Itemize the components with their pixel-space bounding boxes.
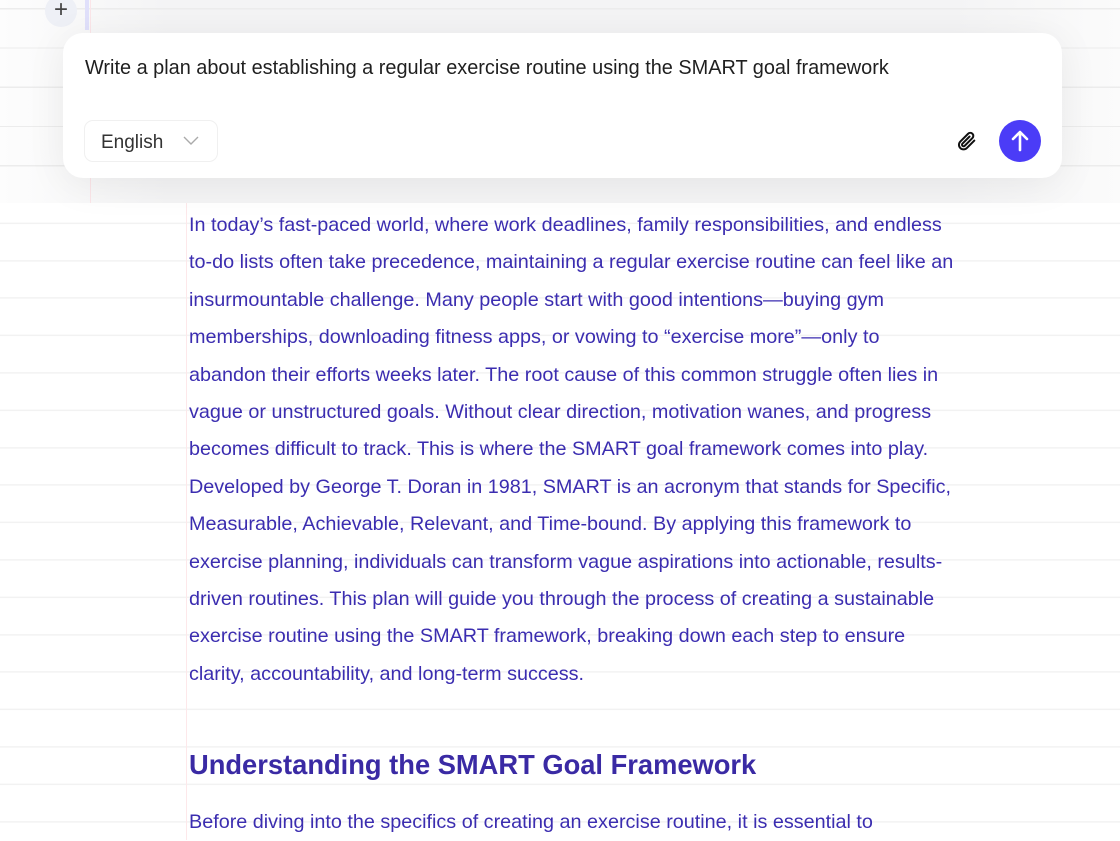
- second paragraph: Before diving into the specifics of creating an exercise routine, it is essential to: [189, 811, 873, 833]
- icon: plus button: [45, 0, 77, 27]
- intro paragraph: exercise routine using the SMART framework, breaking down each step to ensure: [189, 625, 905, 647]
- intro paragraph: insurmountable challenge. Many people start with good intentions—buying gym: [189, 289, 884, 311]
- icon: send button: [999, 120, 1041, 162]
- icon: paperclip: [958, 132, 976, 150]
- language selector: English: [101, 132, 163, 153]
- top overlay: [0, 0, 1120, 203]
- intro paragraph: exercise planning, individuals can transform vague aspirations into actionable, results-: [189, 551, 942, 573]
- heading: Understanding the SMART Goal Framework: [189, 749, 756, 780]
- intro paragraph: driven routines. This plan will guide you through the process of creating a sustainable: [189, 588, 934, 610]
- input card: [63, 33, 1062, 178]
- intro paragraph: to-do lists often take precedence, maintaining a regular exercise routine can feel like an: [189, 251, 953, 273]
- intro paragraph: In today’s fast-paced world, where work deadlines, family responsibilities, and endless: [189, 214, 942, 236]
- intro paragraph: abandon their efforts weeks later. The root cause of this common struggle often lies in: [189, 364, 938, 386]
- intro paragraph: clarity, accountability, and long-term success.: [189, 663, 584, 685]
- intro paragraph: Measurable, Achievable, Relevant, and Time-bound. By applying this framework to: [189, 513, 911, 535]
- intro paragraph: becomes difficult to track. This is where the SMART goal framework comes into play.: [189, 438, 928, 460]
- language selector: [84, 120, 218, 162]
- intro paragraph: Developed by George T. Doran in 1981, SMART is an acronym that stands for Specific,: [189, 476, 951, 498]
- intro paragraph: [189, 214, 953, 685]
- prompt text: Write a plan about establishing a regular exercise routine using the SMART goal framework: [85, 57, 889, 79]
- intro paragraph: vague or unstructured goals. Without clear direction, motivation wanes, and progress: [189, 401, 931, 423]
- intro paragraph: memberships, downloading fitness apps, or vowing to “exercise more”—only to: [189, 326, 879, 348]
